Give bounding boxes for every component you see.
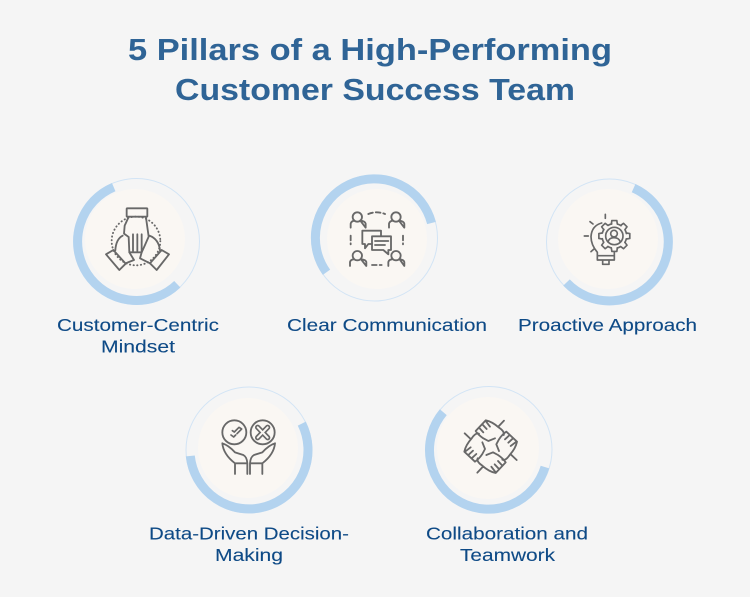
label: data-driven decision-making: Making — [215, 545, 283, 565]
panel: clear communication — [312, 175, 438, 301]
icon: hands holding check and cross — [222, 420, 275, 474]
label: clear communication: Clear Communication — [287, 315, 487, 335]
label: collaboration and teamwork: Collaboration and — [426, 524, 588, 544]
label: proactive approach: Proactive Approach — [518, 315, 697, 335]
panel: data-driven decision-making — [186, 387, 312, 513]
label: data-driven decision-making: Data-Driven Decision- — [149, 524, 349, 544]
label: customer-centric mindset — [57, 315, 219, 356]
icon: people with speech bubbles — [350, 212, 404, 266]
title: 5 Pillars of a High-Performing — [128, 32, 612, 67]
icon: light bulb with gear — [584, 214, 630, 264]
title — [128, 32, 612, 107]
label: collaboration and teamwork: Teamwork — [460, 545, 555, 565]
icon: three joined hands — [106, 208, 169, 270]
panel: proactive approach — [546, 179, 672, 305]
label: customer-centric mindset: Mindset — [101, 336, 175, 356]
label: customer-centric mindset: Customer-Centric — [57, 315, 219, 335]
panel: customer-centric mindset — [74, 178, 200, 304]
title: Customer Success Team — [175, 72, 575, 107]
panel: collaboration and teamwork — [426, 386, 552, 512]
label: data-driven decision-making — [149, 524, 349, 565]
label: collaboration and teamwork — [426, 524, 588, 565]
icon: four interlocked hands — [464, 420, 517, 473]
